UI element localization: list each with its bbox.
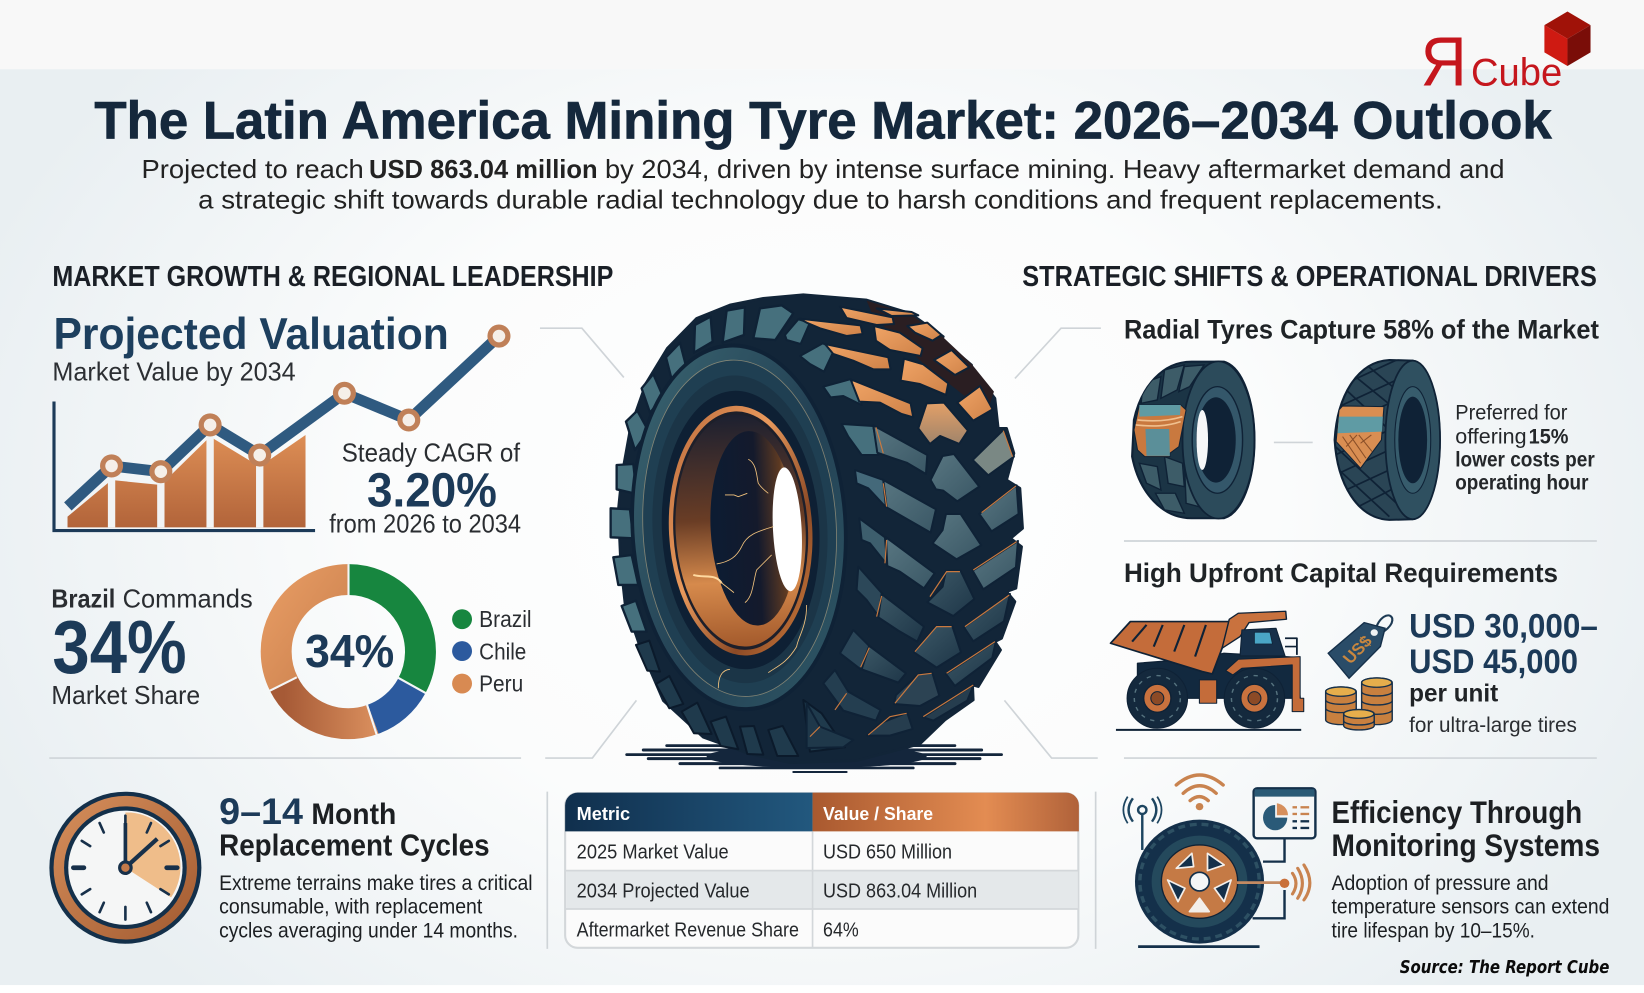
icon: price tag: US$ — [1339, 632, 1377, 667]
subtitle: Projected to reach — [142, 154, 364, 184]
radial benefit text — [1455, 401, 1595, 495]
logo: RCube — [1421, 12, 1591, 101]
icon: bias tyre cutaway — [1332, 360, 1440, 520]
ground shadow — [627, 745, 1002, 772]
market value label: Market Value by 2034 — [52, 357, 296, 387]
monitoring dashboard — [1253, 788, 1315, 918]
monitoring systems text: temperature sensors can extend — [1332, 896, 1609, 919]
data table: 2034 Projected Value — [577, 880, 750, 902]
Brazil market share text: Commands — [123, 584, 253, 614]
title: The Latin America Mining Tyre Market: 2026–2034 Outlook — [94, 92, 1553, 150]
projected valuation heading: Projected Valuation — [53, 310, 449, 359]
top band — [0, 0, 1644, 69]
wheel — [1135, 820, 1264, 947]
replacement cycles text: Month — [311, 798, 396, 831]
replacement cycles text — [219, 791, 533, 942]
wifi signal — [1176, 775, 1223, 810]
price text: for ultra-large tires — [1409, 714, 1577, 737]
donut chart — [269, 564, 426, 737]
Brazil market share text: 34% — [52, 605, 187, 689]
monitoring systems text: Monitoring Systems — [1332, 828, 1600, 863]
radial benefit text: 15% — [1529, 426, 1569, 449]
monitoring systems text: Efficiency Through — [1332, 795, 1582, 830]
capital requirements heading: High Upfront Capital Requirements — [1124, 557, 1558, 588]
data table — [565, 793, 1079, 948]
data table: 2025 Market Value — [577, 842, 729, 864]
data table: Value / Share — [823, 803, 933, 824]
Brazil market share text — [51, 584, 253, 710]
data table: Aftermarket Revenue Share — [577, 919, 799, 941]
donut chart: 34% — [305, 625, 394, 677]
subtitle — [142, 154, 1505, 215]
glowing cracks — [717, 459, 807, 688]
sensor — [1237, 865, 1310, 900]
tread blocks — [840, 307, 1019, 736]
tyre silhouette — [618, 295, 1023, 763]
small tyres comparison — [1132, 360, 1440, 520]
donut legend — [452, 606, 532, 696]
icon: mining dump truck — [1111, 611, 1304, 730]
subtitle: by 2034, driven by intense surface mining. Heavy aftermarket demand and — [605, 154, 1505, 184]
radial tyres heading: Radial Tyres Capture 58% of the Market — [1124, 314, 1599, 345]
data table: USD 863.04 Million — [823, 880, 977, 902]
tyre opening — [770, 467, 805, 592]
monitoring systems text: tire lifespan by 10–15%. — [1332, 919, 1535, 942]
replacement cycles text: Replacement Cycles — [219, 829, 490, 863]
CAGR callout: from 2026 to 2034 — [329, 509, 521, 539]
radial benefit text: lower costs per — [1455, 449, 1595, 472]
replacement cycles text: Extreme terrains make tires a critical — [219, 872, 533, 895]
sidewall — [621, 338, 857, 717]
subtitle: a strategic shift towards durable radial technology due to harsh conditions and frequent replacements. — [198, 185, 1443, 215]
icon: clock — [49, 792, 201, 944]
antenna — [1123, 797, 1162, 850]
tread bars — [785, 319, 936, 748]
price text: per unit — [1409, 679, 1499, 707]
icon: price tag — [1328, 615, 1392, 678]
donut legend: Peru — [479, 670, 523, 696]
Brazil market share text: Brazil — [51, 584, 115, 614]
monitoring systems text — [1332, 795, 1609, 942]
logo: RCube: Я — [1421, 23, 1467, 101]
Brazil market share text: Market Share — [51, 680, 200, 710]
radial benefit text: Preferred for — [1455, 401, 1567, 424]
central mining tyre illustration — [611, 295, 1023, 772]
icon: radial tyre cutaway — [1132, 361, 1254, 519]
logo: RCube: Cube — [1471, 52, 1562, 95]
price text: USD 45,000 — [1409, 643, 1578, 681]
radial benefit text: operating hour — [1455, 472, 1588, 495]
icon: coin stacks — [1326, 678, 1392, 730]
heading: market growth: MARKET GROWTH & REGIONAL LEADERSHIP — [52, 260, 613, 292]
copper rim — [663, 402, 819, 659]
replacement cycles text: consumable, with replacement — [219, 896, 482, 919]
data table: Metric — [577, 803, 630, 824]
CAGR callout: Steady CAGR of — [342, 437, 521, 467]
CAGR callout: 3.20% — [367, 463, 497, 517]
icon: wheel with monitoring sensors — [1123, 775, 1315, 947]
line and area chart — [54, 327, 508, 531]
price text — [1409, 607, 1598, 737]
replacement cycles text: 9–14 — [219, 791, 304, 832]
data table: 64% — [823, 919, 859, 941]
icons: truck tag coins — [1111, 611, 1392, 730]
donut legend: Brazil — [479, 606, 532, 632]
replacement cycles text: cycles averaging under 14 months. — [219, 919, 518, 942]
sidewall lugs — [611, 305, 793, 632]
tyre interior — [706, 429, 801, 628]
donut legend: Chile — [479, 638, 526, 664]
data table: USD 650 Million — [823, 842, 952, 864]
radial benefit text: offering — [1455, 426, 1527, 449]
CAGR callout — [329, 437, 521, 539]
source credit: Source: The Report Cube — [1400, 957, 1609, 978]
subtitle: USD 863.04 million — [369, 154, 598, 184]
monitoring systems text: Adoption of pressure and — [1332, 872, 1549, 895]
price text: USD 30,000– — [1409, 607, 1598, 645]
